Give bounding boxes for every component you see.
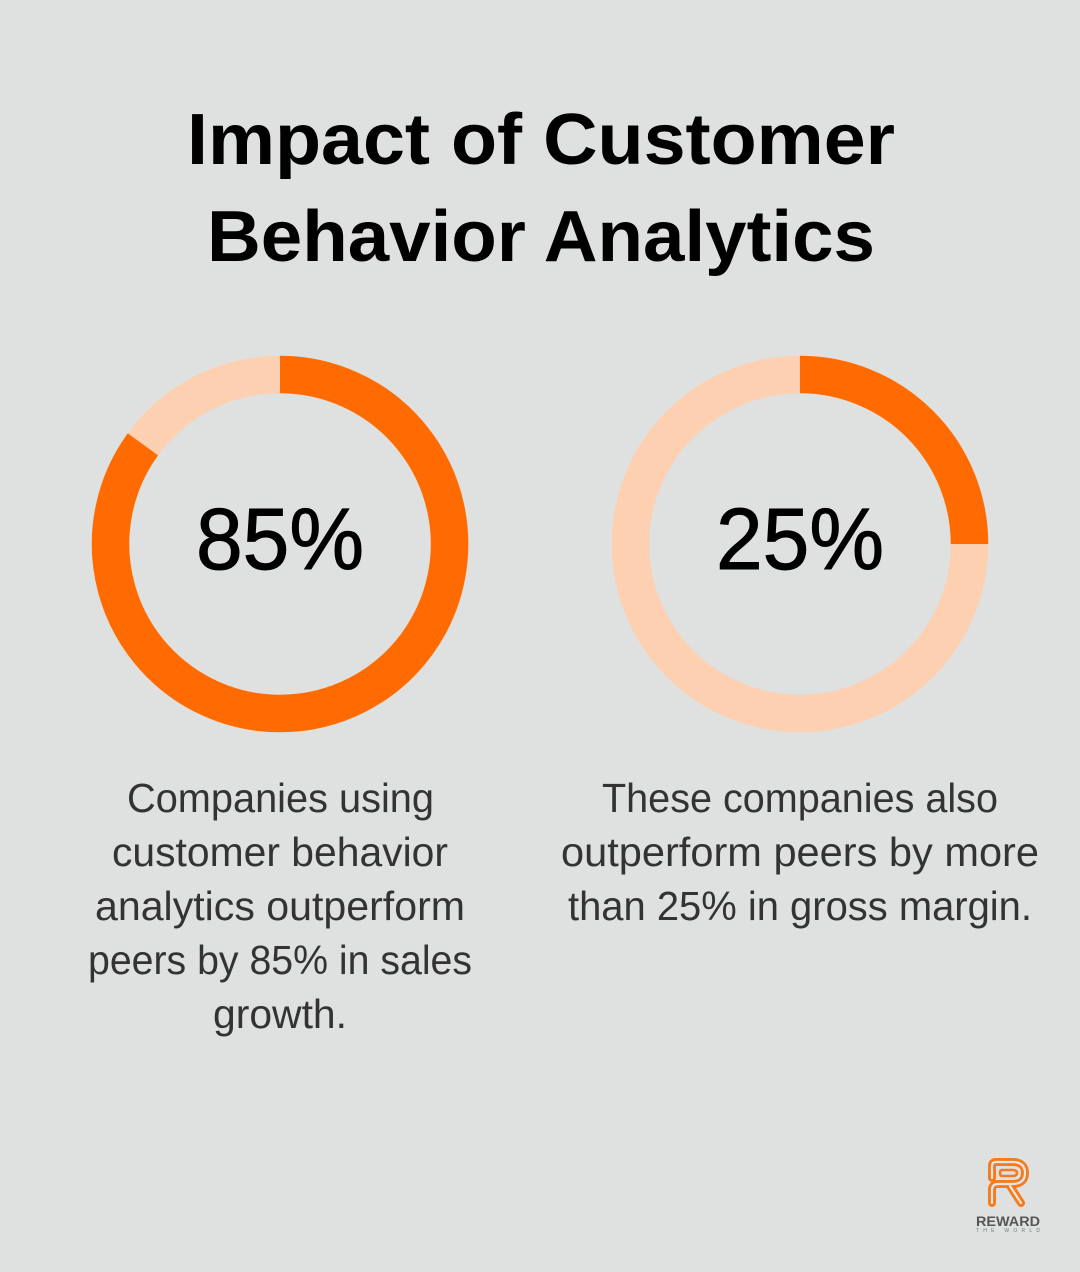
description: sales growth: customer behavior: [112, 829, 448, 875]
description: sales growth: [88, 775, 472, 1037]
description: gross margin: outperform peers by more: [561, 829, 1039, 875]
description: sales growth: Companies using: [127, 775, 434, 821]
title: [187, 100, 895, 277]
panel: 85% statistic: [88, 374, 472, 1037]
description: gross margin: [561, 775, 1039, 929]
donut chart: 85%: [110, 374, 450, 714]
description: sales growth: growth.: [213, 991, 347, 1037]
icon: R mark: [992, 1162, 1025, 1203]
panel: 25% statistic: [561, 374, 1039, 929]
description: sales growth: peers by 85% in sales: [88, 937, 472, 983]
logo: Reward the World: [976, 1162, 1040, 1234]
description: gross margin: than 25% in gross margin.: [568, 883, 1032, 929]
value: 85%: 85%: [196, 491, 364, 588]
description: sales growth: analytics outperform: [95, 883, 465, 929]
description: gross margin: These companies also: [602, 775, 998, 821]
logo wordmark: REWARD: [976, 1214, 1040, 1229]
title: Impact of Customer: [187, 100, 895, 180]
logo tagline: THE WORLD: [976, 1228, 1040, 1234]
title: Behavior Analytics: [207, 197, 875, 277]
value: 25%: 25%: [716, 491, 884, 588]
donut chart: 25%: [630, 374, 970, 714]
